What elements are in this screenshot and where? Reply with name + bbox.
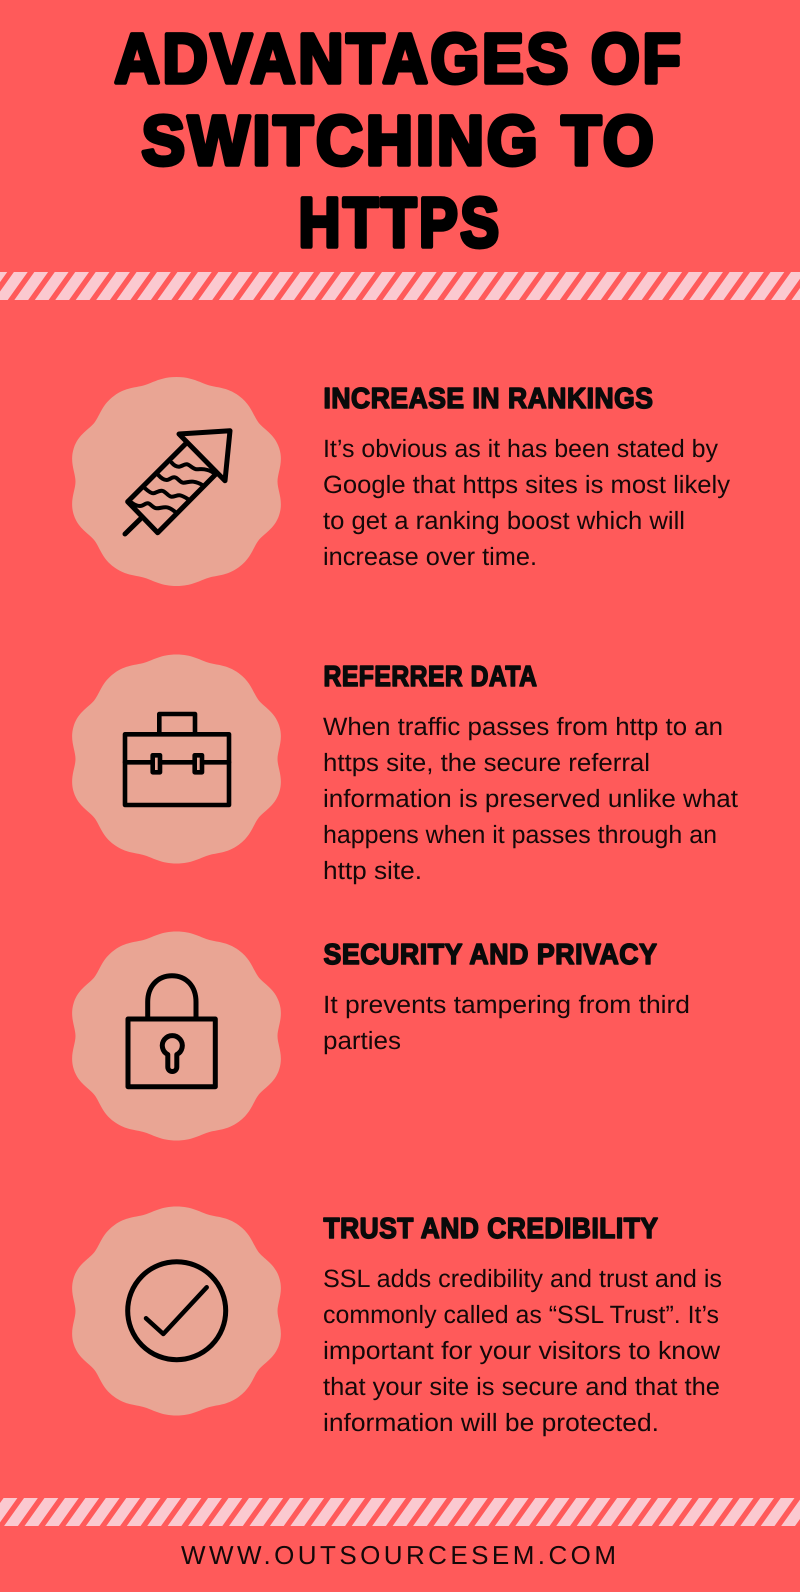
text block: trust and credibility: important for your visitors to know [323, 1337, 721, 1365]
text block: referrer data: happens when it passes through an [323, 821, 717, 849]
icon: briefcase on badge [72, 654, 281, 864]
title: SWITCHING TO [142, 102, 656, 180]
title: HTTPS [298, 184, 502, 262]
icon: check mark in circle on badge [72, 1206, 281, 1416]
text block: increase in rankings: increase over time. [323, 543, 537, 571]
heading: referrer data: REFERRER DATA [324, 661, 538, 693]
text block: trust and credibility: SSL adds credibility and trust and is [323, 1265, 722, 1293]
text block: security and privacy: parties [323, 1027, 401, 1055]
footer website address: WWW.OUTSOURCESEM.COM [181, 1540, 616, 1570]
text block: increase in rankings: to get a ranking boost which will [323, 507, 685, 535]
text block: referrer data [323, 713, 738, 885]
text block: referrer data: When traffic passes from http to an [323, 713, 723, 741]
text block: referrer data: https site, the secure referral [323, 749, 650, 777]
panel: referrer data [72, 654, 738, 885]
title: ADVANTAGES OF [114, 20, 684, 98]
text block: referrer data: information is preserved unlike what [323, 785, 738, 813]
text block: increase in rankings: Google that https sites is most likely [323, 471, 731, 499]
text block: security and privacy: It prevents tampering from third [323, 991, 690, 1019]
icon: padlock on badge [72, 932, 281, 1140]
text block: trust and credibility [323, 1265, 722, 1437]
text block: trust and credibility: information will be protected. [323, 1409, 659, 1437]
panel: security and privacy [72, 932, 690, 1140]
text block: increase in rankings: It’s obvious as it has been stated by [323, 435, 718, 463]
title [114, 20, 684, 262]
icon: firework rocket on badge [72, 377, 281, 586]
heading: trust and credibility: TRUST AND CREDIBILITY [324, 1213, 658, 1245]
panel: increase in rankings [72, 377, 731, 586]
text block: trust and credibility: commonly called as “SSL Trust”. It’s [323, 1301, 719, 1329]
panel: trust and credibility [72, 1206, 722, 1437]
text block: security and privacy [323, 991, 690, 1055]
striped divider: top [0, 272, 800, 300]
text block: increase in rankings [323, 435, 731, 571]
striped divider: bottom [0, 1498, 800, 1526]
text block: referrer data: http site. [323, 857, 422, 885]
text block: trust and credibility: that your site is secure and that the [323, 1373, 720, 1401]
heading: increase in rankings: INCREASE IN RANKINGS [324, 383, 654, 415]
heading: security and privacy: SECURITY AND PRIVACY [324, 939, 658, 971]
